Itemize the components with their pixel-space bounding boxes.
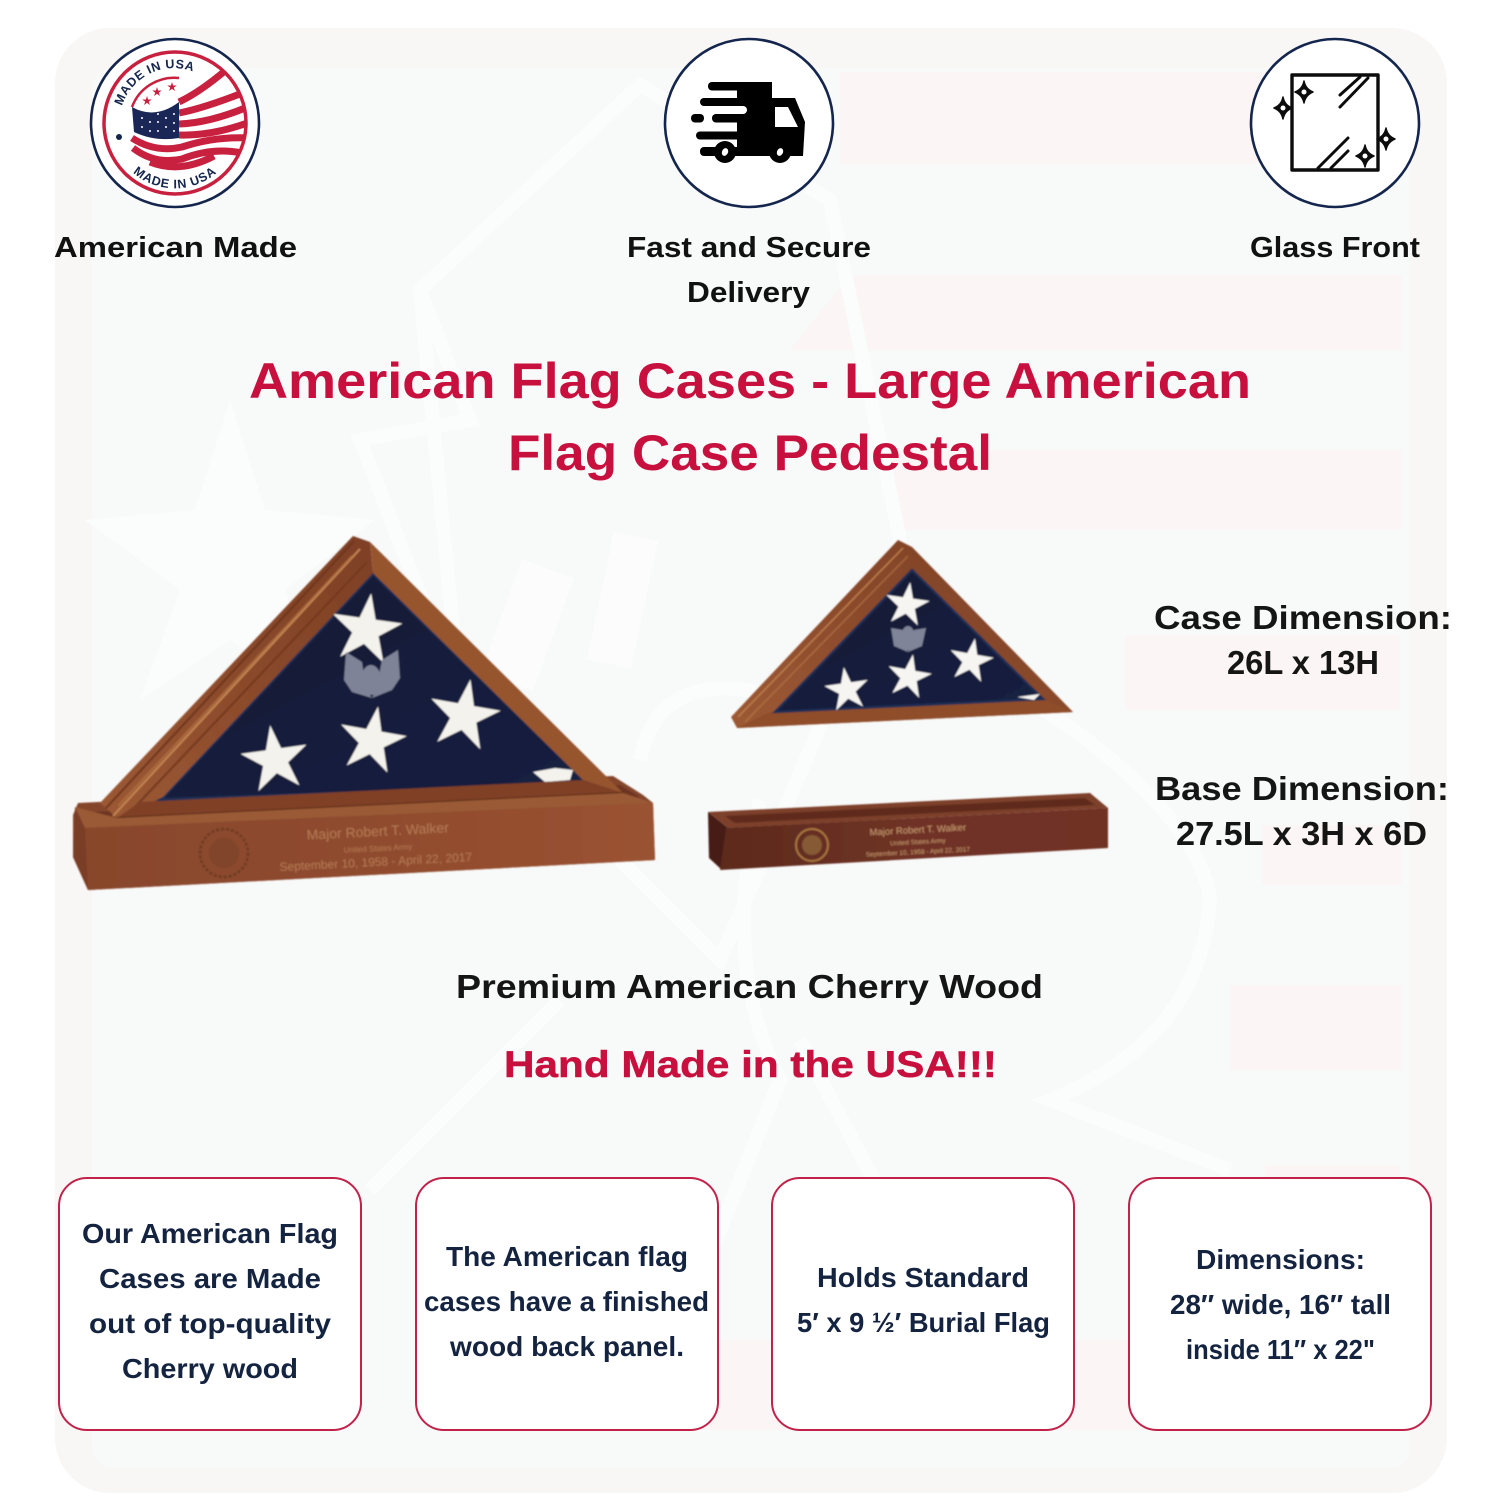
panel: back panel: wood back panel.	[449, 1331, 684, 1362]
hand made callout: Hand Made in the USA!!!	[504, 1044, 997, 1085]
lower base	[708, 793, 1108, 828]
title: Flag Case Pedestal	[508, 425, 992, 481]
panel: dimensions: inside 11″ x 22"	[1186, 1334, 1375, 1365]
title	[249, 353, 1251, 481]
product photo: separated case and base: September 10, 1958 - April 22, 2017	[866, 846, 971, 859]
label: Fast and Secure Delivery: Fast and Secure	[627, 232, 871, 264]
icon: made in USA badge: MADE IN USA	[134, 166, 216, 188]
pedestal body silhouette	[73, 776, 655, 890]
panel: material: Cases are Made	[99, 1263, 321, 1294]
eagle emblem	[344, 650, 400, 698]
panel: back panel: The American flag	[446, 1241, 688, 1272]
product photo: separated case and base: United States Army	[890, 838, 947, 847]
icon: made in USA badge: MADE IN USA	[114, 59, 192, 106]
case dimension: Case Dimension:	[1154, 599, 1452, 636]
product photo: separated case and base	[708, 540, 1108, 870]
base dimension	[1155, 770, 1449, 852]
product photo: separated case and base: Major Robert T. Walker	[869, 822, 966, 839]
label: Fast and Secure Delivery: Delivery	[687, 277, 810, 309]
upper case	[731, 540, 1073, 728]
base dimension: Base Dimension:	[1155, 770, 1449, 807]
eagle emblem small	[891, 626, 926, 652]
product photo: flag case on pedestal: September 10, 1958 - April 22, 2017	[279, 850, 473, 874]
panel: dimensions: 28″ wide, 16″ tall	[1170, 1289, 1391, 1320]
wood caption: Premium American Cherry Wood	[456, 968, 1043, 1005]
title: American Flag Cases - Large American	[249, 353, 1251, 409]
icon: delivery truck	[665, 39, 833, 207]
panel: burial flag: Holds Standard	[817, 1262, 1029, 1293]
panel: dimensions: Dimensions:	[1196, 1244, 1365, 1275]
panel: back panel: cases have a finished	[424, 1286, 709, 1317]
panel: material	[59, 1178, 361, 1430]
panel: burial flag: 5′ x 9 ½′ Burial Flag	[797, 1307, 1050, 1338]
frame bottom rail	[117, 780, 623, 818]
icon: glass pane	[1251, 39, 1419, 207]
label: Fast and Secure Delivery	[627, 232, 871, 309]
panel: dimensions	[1129, 1178, 1431, 1430]
base dimension: 27.5L x 3H x 6D	[1176, 815, 1427, 852]
icon: made in USA badge	[90, 38, 260, 208]
panel: material: Cherry wood	[122, 1353, 298, 1384]
case dimension	[1154, 599, 1452, 681]
panel: burial flag	[772, 1178, 1074, 1430]
label: Glass Front: Glass Front	[1250, 232, 1420, 264]
frame right moulding	[370, 542, 623, 793]
frame left moulding	[100, 536, 373, 818]
panel: material: out of top-quality	[89, 1308, 331, 1339]
case dimension: 26L x 13H	[1227, 644, 1379, 681]
pedestal lip and front	[75, 793, 653, 828]
product photo: flag case on pedestal: United States Army	[343, 842, 412, 855]
product photo: flag case on pedestal: Major Robert T. Walker	[306, 819, 450, 843]
label: American Made: American Made	[54, 232, 297, 264]
panel: back panel	[416, 1178, 718, 1430]
product photo: flag case on pedestal	[73, 536, 655, 890]
flag field	[160, 573, 590, 800]
panel: material: Our American Flag	[82, 1218, 338, 1249]
